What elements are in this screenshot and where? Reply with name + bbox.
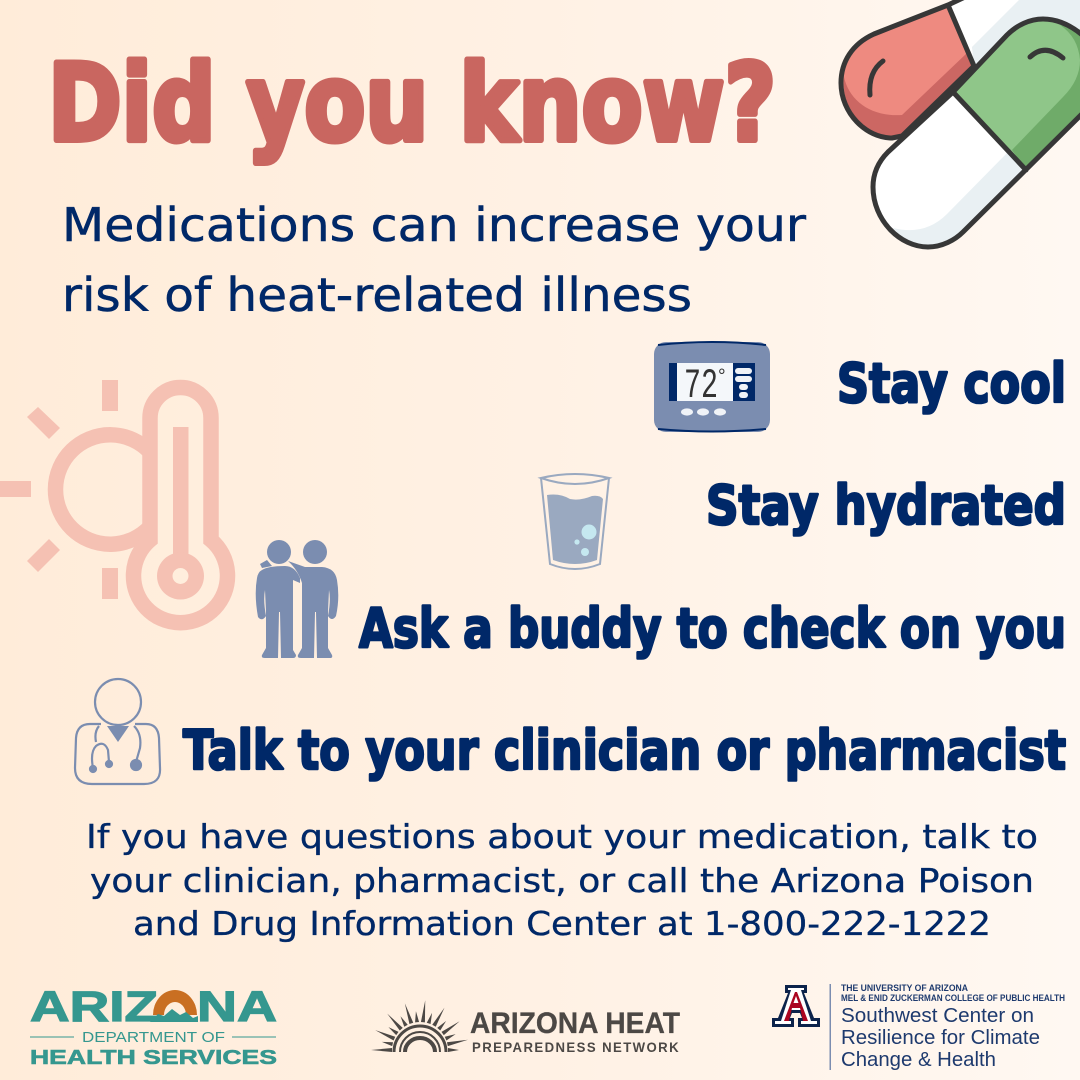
logo text: Southwest Center xyxy=(841,983,1065,1071)
logo text: Southwest Center: THE UNIVERSITY OF ARIZONA xyxy=(841,983,968,994)
icon: sun and thermometer xyxy=(0,380,228,623)
icon: glass of water xyxy=(541,474,609,569)
body text: your clinician, pharmacist, or call the Arizona Poison xyxy=(90,861,1034,900)
logo: Arizona Department of Health Services xyxy=(30,983,277,1069)
icon: thermostat: ° xyxy=(718,366,726,387)
logo: Arizona Department of Health Services: NA xyxy=(197,983,277,1031)
divider line xyxy=(830,984,831,1070)
logo: Arizona Department of Health Services: ARIZ xyxy=(30,983,158,1031)
icon: capsules xyxy=(841,0,1080,247)
icon: thermostat xyxy=(654,342,770,432)
logo: Arizona Heat Preparedness Network: ARIZONA HEAT xyxy=(470,1007,680,1040)
logo text: Southwest Center: Change & Health xyxy=(841,1049,996,1071)
subtitle: Medications can increase your xyxy=(62,198,806,252)
icon: thermostat: 72 xyxy=(684,362,718,410)
subtitle: risk of heat-related illness xyxy=(62,268,692,322)
subtitle xyxy=(62,198,806,322)
logo: University of Arizona A xyxy=(772,985,820,1027)
logo text: Southwest Center: Southwest Center on xyxy=(841,1005,1034,1027)
logo: Arizona Heat Preparedness Network: PREPAREDNESS NETWORK xyxy=(472,1039,680,1055)
icon: two people xyxy=(256,540,338,658)
logo: Arizona Department of Health Services: DEPARTMENT OF xyxy=(82,1029,225,1046)
body text: and Drug Information Center at 1-800-222-1222 xyxy=(133,904,991,943)
body text xyxy=(86,817,1038,943)
logo: Arizona Department of Health Services: HEALTH SERVICES xyxy=(30,1047,277,1069)
logo: Arizona Heat Preparedness Network xyxy=(371,1000,680,1055)
title: Did you know? xyxy=(48,42,776,165)
body text: If you have questions about your medication, talk to xyxy=(86,817,1038,856)
logo text: Southwest Center: Resilience for Climate xyxy=(841,1027,1040,1049)
icon: clinician xyxy=(75,679,160,784)
